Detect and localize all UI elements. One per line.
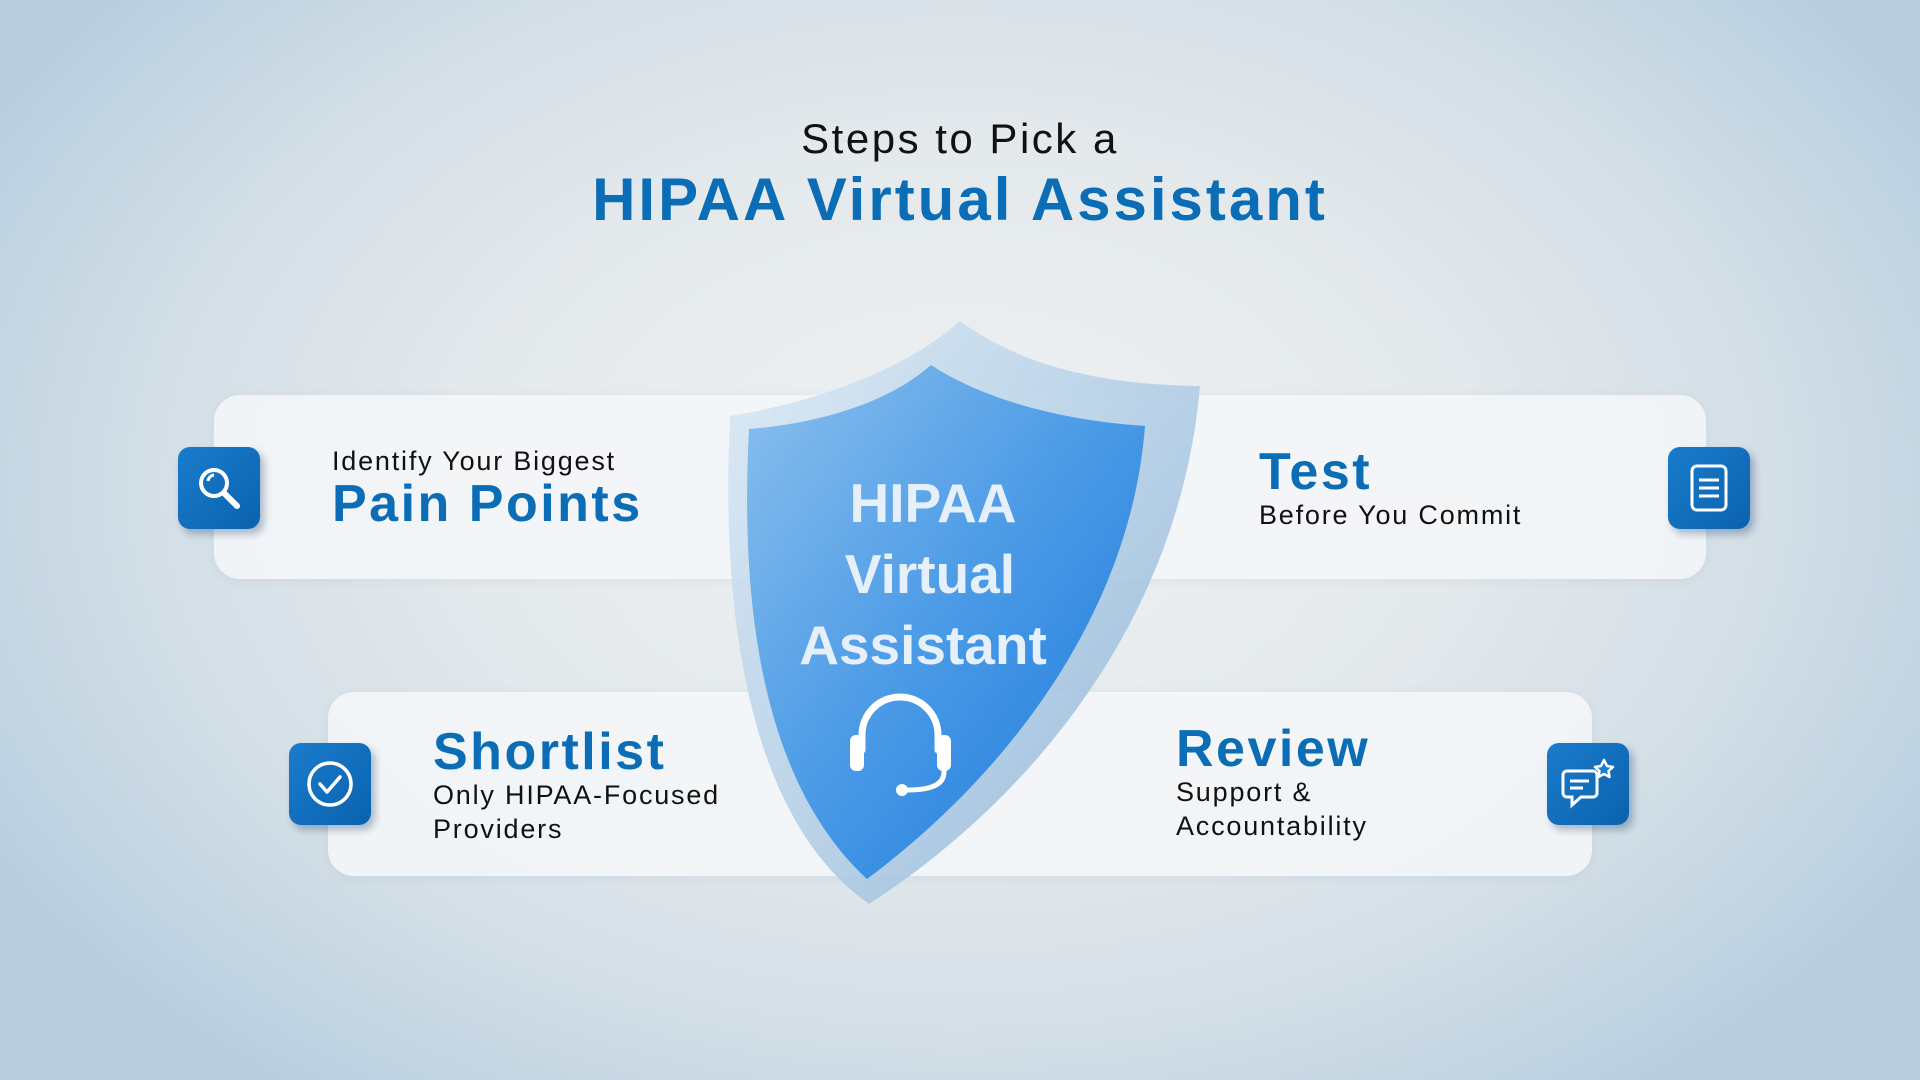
title: Steps to Pick a — [801, 115, 1119, 162]
title: HIPAA Virtual Assistant — [592, 166, 1328, 233]
text: review: Accountability — [1176, 811, 1368, 841]
text: test: Test — [1259, 443, 1372, 501]
title — [592, 115, 1328, 233]
text: test: Before You Commit — [1259, 500, 1522, 530]
shield text: Virtual — [845, 543, 1015, 605]
text: shortlist — [433, 723, 720, 844]
text: pain points: Identify Your Biggest — [332, 446, 616, 476]
text: test — [1259, 443, 1522, 530]
shield text — [799, 472, 1047, 676]
icon: headset — [850, 697, 951, 796]
panel: top — [214, 395, 1706, 579]
text: pain points: Pain Points — [332, 475, 643, 533]
text: pain points — [332, 446, 643, 533]
icon: search — [178, 447, 260, 529]
icon: check — [289, 743, 371, 825]
panel: bottom — [328, 692, 1592, 876]
icon: document — [1668, 447, 1750, 529]
text: review — [1176, 720, 1370, 841]
text: shortlist: Providers — [433, 814, 563, 844]
shield text: HIPAA — [849, 472, 1017, 534]
shield text: Assistant — [799, 614, 1047, 676]
text: review: Support & — [1176, 777, 1312, 807]
text: shortlist: Shortlist — [433, 723, 666, 781]
text: shortlist: Only HIPAA-Focused — [433, 780, 720, 810]
icon: review chat — [1547, 743, 1629, 825]
text: review: Review — [1176, 720, 1370, 778]
